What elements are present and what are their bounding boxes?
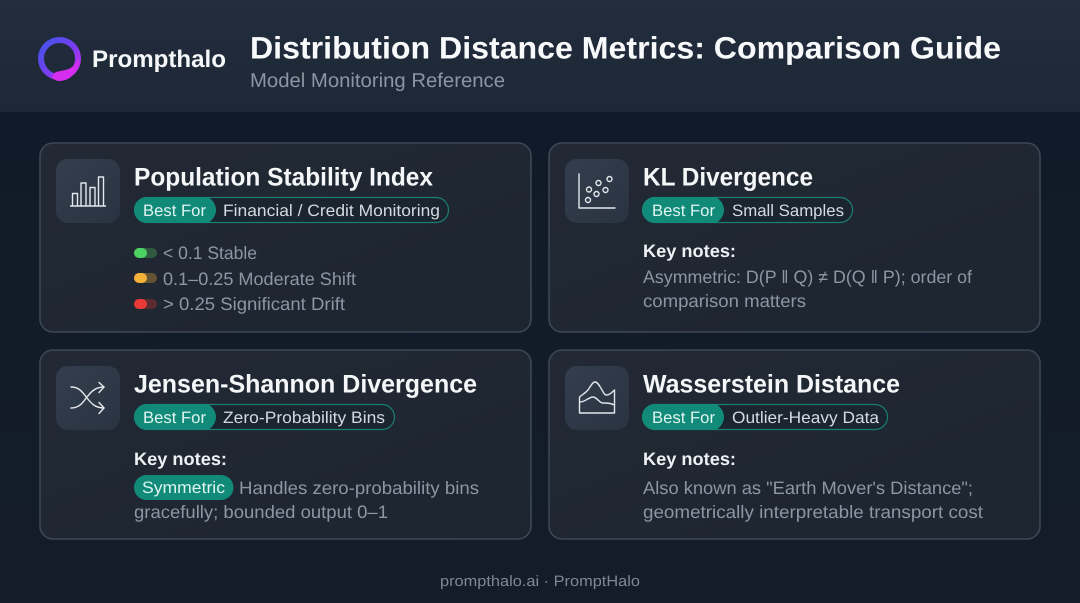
best for badge: Best For <box>143 409 207 427</box>
key notes <box>134 449 479 522</box>
stable threshold: < 0.1 Stable <box>163 243 257 263</box>
icon: shuffle arrows <box>56 366 120 430</box>
best for badge: Best For <box>143 202 207 220</box>
panel: Population Stability Index <box>40 143 531 332</box>
subtitle: Model Monitoring Reference <box>250 70 505 92</box>
best for badge <box>134 197 448 223</box>
key notes: Key notes: <box>134 449 227 469</box>
panel: KL Divergence <box>549 143 1040 332</box>
key notes: Handles zero-probability bins <box>239 478 479 498</box>
best for badge: Small Samples <box>732 202 844 220</box>
key notes: geometrically interpretable transport cost <box>643 502 983 522</box>
best for badge: Zero-Probability Bins <box>223 409 385 427</box>
best for badge: Best For <box>652 202 716 220</box>
best for badge: Outlier-Heavy Data <box>732 409 880 427</box>
panel: Jensen-Shannon Divergence <box>40 350 531 539</box>
key notes <box>643 449 983 522</box>
key notes: gracefully; bounded output 0–1 <box>134 502 388 522</box>
icon: scatter plot <box>565 159 629 223</box>
footer: prompthalo.ai · PromptHalo <box>440 573 640 590</box>
legend: PSI thresholds <box>134 243 356 314</box>
icon: bar chart <box>56 159 120 223</box>
heading: KL Divergence <box>643 164 813 192</box>
icon: overlapping distributions <box>565 366 629 430</box>
brand name: Prompthalo <box>92 46 226 73</box>
best for badge <box>642 197 852 223</box>
key notes: Key notes: <box>643 241 736 261</box>
key notes <box>643 241 973 311</box>
header band <box>0 0 1080 112</box>
key notes: Asymmetric: D(P ‖ Q) ≠ D(Q ‖ P); order of <box>643 267 973 287</box>
significant threshold: > 0.25 Significant Drift <box>163 294 345 314</box>
best for badge <box>134 404 394 430</box>
heading: Population Stability Index <box>134 164 433 192</box>
best for badge <box>642 404 888 430</box>
symmetric tag: Symmetric <box>142 479 225 497</box>
logo mark <box>41 40 79 81</box>
key notes: Also known as "Earth Mover's Distance"; <box>643 478 973 498</box>
heading: Jensen-Shannon Divergence <box>134 370 477 398</box>
symmetric tag <box>134 475 234 500</box>
panel: Wasserstein Distance <box>549 350 1040 539</box>
key notes: Key notes: <box>643 449 736 469</box>
key notes: comparison matters <box>643 291 806 311</box>
best for badge: Best For <box>652 409 716 427</box>
best for badge: Financial / Credit Monitoring <box>223 202 440 220</box>
heading: Wasserstein Distance <box>643 370 900 398</box>
moderate threshold: 0.1–0.25 Moderate Shift <box>163 269 356 289</box>
title: Distribution Distance Metrics: Comparison Guide <box>250 30 1001 66</box>
